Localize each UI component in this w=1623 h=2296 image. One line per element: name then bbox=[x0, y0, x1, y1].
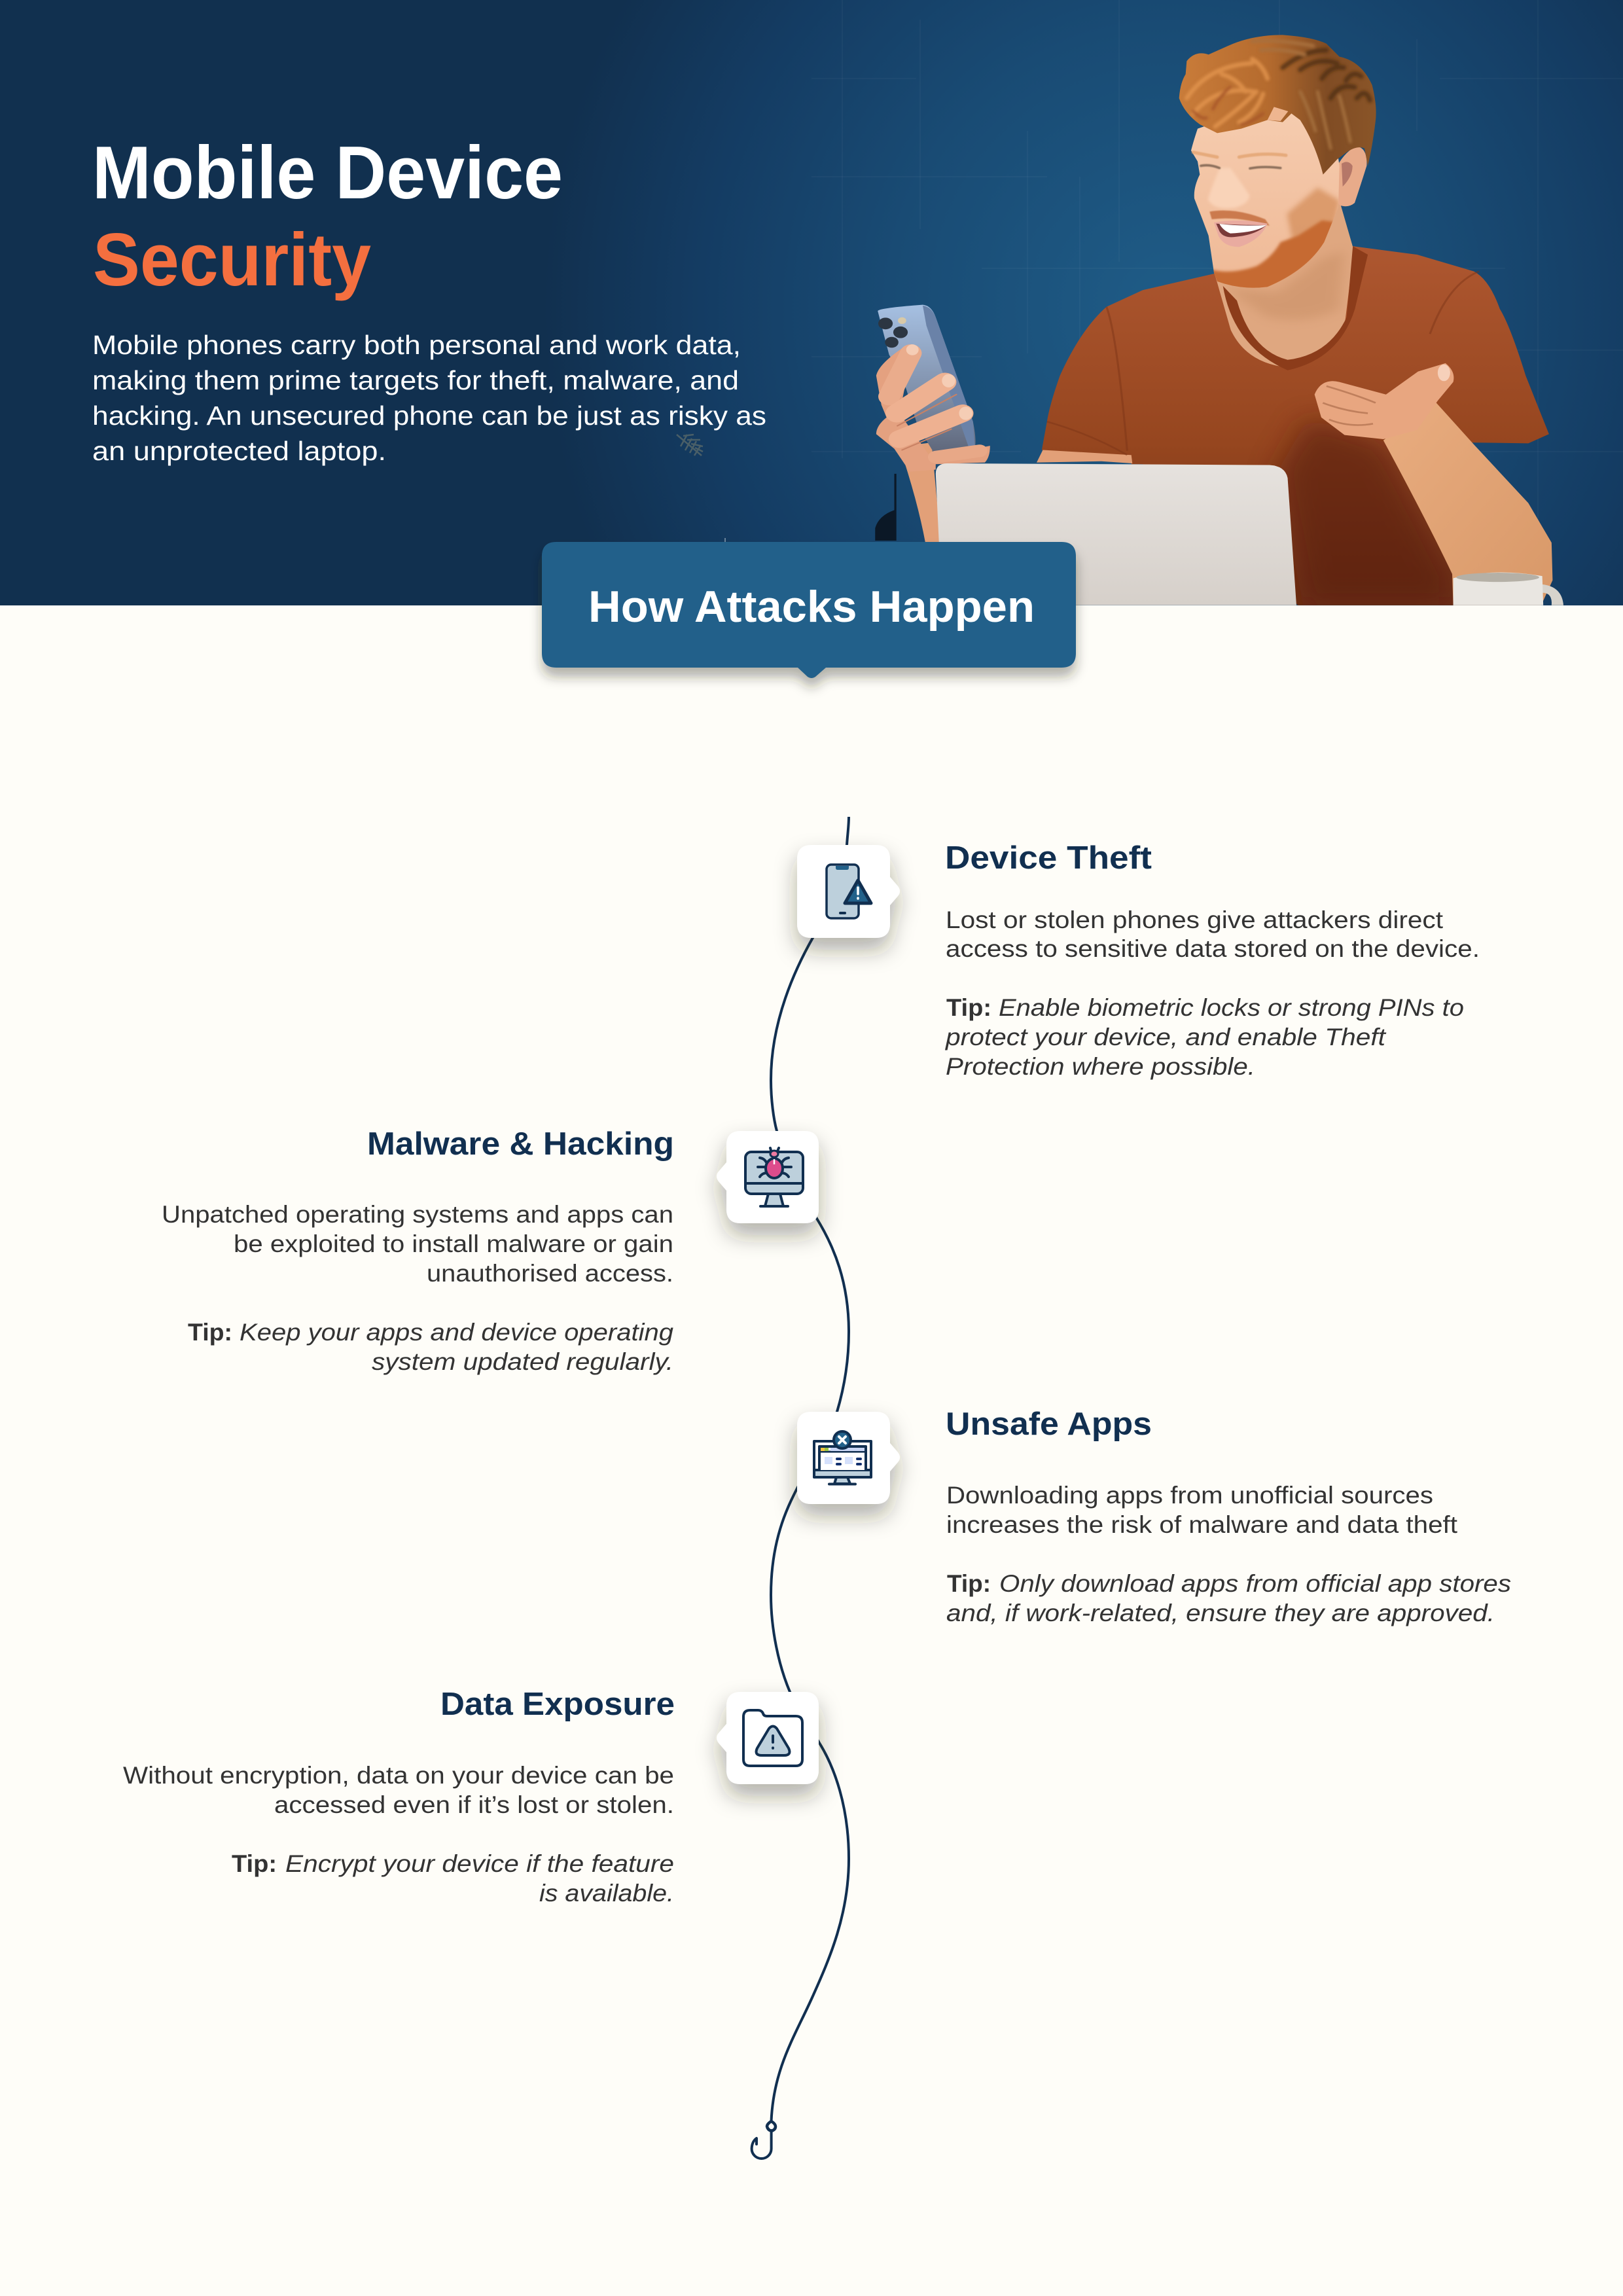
cheek and beard bbox=[1209, 188, 1340, 292]
text: unsafe apps: Downloading apps from unofficial sources bbox=[946, 1482, 1433, 1509]
text: malware and hacking: Unpatched operating systems and apps can bbox=[162, 1201, 673, 1228]
text: unsafe apps: increases the risk of malware and data theft bbox=[946, 1511, 1458, 1538]
eyes and brows bbox=[1193, 152, 1286, 168]
icon card: unsafe apps bbox=[797, 1412, 900, 1504]
nose bbox=[1208, 168, 1249, 208]
timeline curve with hook bbox=[752, 817, 849, 2159]
text: data exposure: Without encryption, data on your device can be bbox=[123, 1762, 674, 1789]
text: malware and hacking: system updated regularly. bbox=[372, 1348, 673, 1375]
text: data exposure: Encrypt your device if the feature bbox=[285, 1850, 674, 1877]
icon: folder with warning bbox=[743, 1710, 802, 1766]
text: device theft: Device Theft bbox=[945, 840, 1152, 876]
icon: phone with warning bbox=[827, 865, 871, 918]
intro paragraph: hacking. An unsecured phone can be just as risky as bbox=[92, 401, 766, 431]
icon: monitor with bug bbox=[745, 1148, 803, 1206]
text: malware and hacking: be exploited to install malware or gain bbox=[234, 1230, 673, 1257]
text: device theft: access to sensitive data stored on the device. bbox=[946, 935, 1480, 962]
section badge: How Attacks Happen bbox=[588, 582, 1035, 632]
text: data exposure: Tip: bbox=[232, 1850, 277, 1877]
title bbox=[92, 132, 563, 302]
text: unsafe apps: Only download apps from official app stores bbox=[999, 1570, 1511, 1597]
text: malware and hacking: Malware & Hacking bbox=[367, 1126, 674, 1162]
head bbox=[1179, 35, 1376, 292]
text: unsafe apps: Tip: bbox=[947, 1570, 991, 1597]
panel: hero banner bbox=[0, 0, 1623, 605]
text: data exposure: accessed even if it’s lost or stolen. bbox=[274, 1791, 674, 1818]
text: device theft: protect your device, and enable Theft bbox=[945, 1024, 1387, 1050]
intro paragraph: Mobile phones carry both personal and work data, bbox=[92, 330, 741, 360]
text: device theft: Tip: bbox=[946, 994, 991, 1021]
intro paragraph: an unprotected laptop. bbox=[92, 436, 386, 466]
text: malware and hacking: unauthorised access. bbox=[427, 1260, 673, 1287]
text: data exposure bbox=[123, 1687, 675, 1907]
icon: fern speck bbox=[677, 435, 703, 456]
text: malware and hacking: Keep your apps and device operating bbox=[240, 1319, 673, 1346]
text: device theft: Lost or stolen phones give attackers direct bbox=[946, 906, 1444, 933]
intro paragraph: making them prime targets for theft, malware, and bbox=[92, 365, 739, 395]
text: unsafe apps: Unsafe Apps bbox=[946, 1407, 1152, 1442]
icon card: device theft bbox=[797, 845, 900, 938]
text: malware and hacking: Tip: bbox=[188, 1319, 232, 1346]
mouth bbox=[1214, 221, 1268, 247]
text: unsafe apps bbox=[946, 1407, 1511, 1626]
ear bbox=[1338, 147, 1366, 207]
section badge bbox=[542, 542, 1076, 678]
hair bbox=[1179, 35, 1376, 175]
icon card: malware and hacking bbox=[717, 1131, 819, 1223]
title: Mobile Device bbox=[92, 132, 563, 215]
icon card: data exposure bbox=[717, 1692, 819, 1784]
face bbox=[1191, 113, 1340, 278]
text: data exposure: Data Exposure bbox=[440, 1687, 675, 1722]
small tick above badge bbox=[724, 538, 726, 542]
text: device theft bbox=[945, 840, 1480, 1080]
text: data exposure: is available. bbox=[539, 1880, 674, 1907]
text: unsafe apps: and, if work-related, ensure they are approved. bbox=[946, 1600, 1495, 1626]
icon: monitor with blocked app bbox=[814, 1431, 871, 1484]
text: malware and hacking bbox=[162, 1126, 674, 1375]
body, phone, laptop bbox=[875, 200, 1563, 605]
text: device theft: Protection where possible. bbox=[946, 1053, 1255, 1080]
text: device theft: Enable biometric locks or strong PINs to bbox=[999, 994, 1464, 1021]
intro paragraph bbox=[92, 330, 766, 466]
title: Security bbox=[93, 219, 371, 302]
photo: man with phone and laptop bbox=[875, 35, 1563, 605]
